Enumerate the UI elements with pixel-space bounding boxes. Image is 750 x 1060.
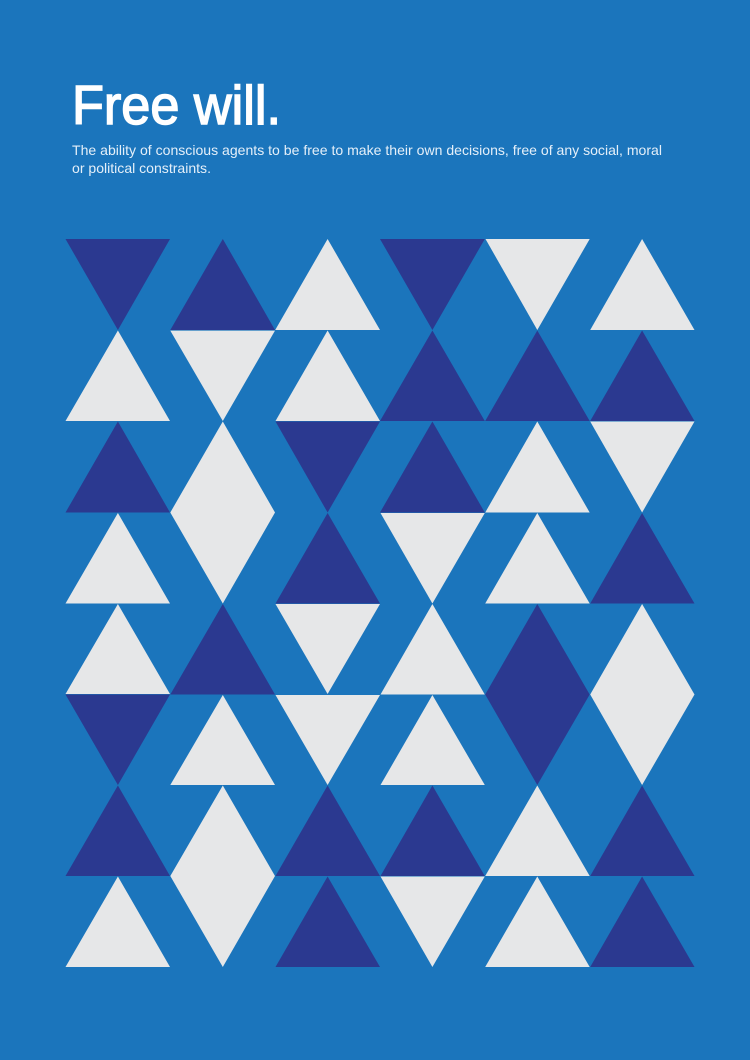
title: Free will. [72, 74, 281, 136]
description text: The ability of conscious agents to be free to make their own decisions, free of any social, moral [72, 142, 662, 158]
triangle grid [66, 239, 694, 967]
light diamond, column 2 lower [170, 786, 275, 967]
light diamond, column 6 [590, 604, 694, 785]
row 2 triangles [66, 330, 694, 421]
row 8 triangles [66, 876, 694, 967]
description text [72, 142, 662, 176]
row 5 triangles [66, 604, 485, 694]
row 4 triangles [66, 513, 694, 604]
row 3 triangles [66, 422, 694, 512]
navy diamond, column 5 [485, 604, 590, 785]
row 1 triangles [66, 239, 694, 330]
row 6 triangles [66, 694, 485, 785]
light diamond, column 2 [170, 422, 275, 604]
row 7 triangles [66, 786, 694, 876]
description text: or political constraints. [72, 160, 211, 176]
